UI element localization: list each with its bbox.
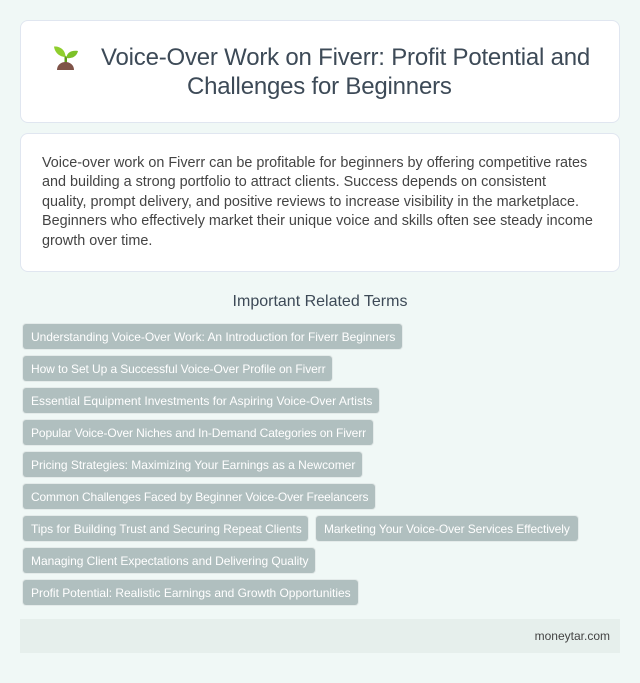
- tag 6: [23, 484, 375, 509]
- summary line 5: growth over time.: [42, 233, 152, 249]
- icon: seedling: [54, 46, 78, 70]
- tag 5: [23, 452, 362, 477]
- footer source: moneytar.com: [535, 629, 610, 643]
- tag 8: [316, 516, 578, 541]
- tag 2: How to Set Up a Successful Voice-Over Profile on Fiverr: [31, 362, 326, 376]
- tag 1: Understanding Voice-Over Work: An Introduction for Fiverr Beginners: [31, 330, 395, 344]
- tag 4: [23, 420, 373, 445]
- tag 10: Profit Potential: Realistic Earnings and Growth Opportunities: [31, 586, 351, 600]
- summary line 1: Voice-over work on Fiverr can be profitable for beginners by offering competitive rates: [42, 155, 587, 171]
- heading: related terms: Important Related Terms: [233, 293, 407, 310]
- panel: summary card: [20, 133, 620, 272]
- tag 8: Marketing Your Voice-Over Services Effectively: [324, 522, 570, 536]
- tag 10: [23, 580, 358, 605]
- tag 2: [23, 356, 332, 381]
- tag 4: Popular Voice-Over Niches and In-Demand Categories on Fiverr: [31, 426, 366, 440]
- tag 5: Pricing Strategies: Maximizing Your Earnings as a Newcomer: [31, 458, 355, 472]
- tag 3: [23, 388, 379, 413]
- tag 6: Common Challenges Faced by Beginner Voice-Over Freelancers: [31, 490, 368, 504]
- summary line 2: and building a strong portfolio to attract clients. Success depends on consistent: [42, 174, 546, 190]
- summary line 3: quality, prompt delivery, and positive reviews to increase visibility in the marketplace.: [42, 194, 579, 210]
- panel: title card: [20, 20, 620, 123]
- tag 9: [23, 548, 315, 573]
- title line 1: Voice-Over Work on Fiverr: Profit Potential and: [101, 44, 590, 71]
- tag 7: [23, 516, 308, 541]
- tag 9: Managing Client Expectations and Delivering Quality: [31, 554, 308, 568]
- summary line 4: Beginners who effectively market their unique voice and skills often see steady income: [42, 213, 593, 229]
- tag 3: Essential Equipment Investments for Aspiring Voice-Over Artists: [31, 394, 372, 408]
- tag 1: [23, 324, 402, 349]
- footer bar: [20, 619, 620, 653]
- tag 7: Tips for Building Trust and Securing Repeat Clients: [31, 522, 302, 536]
- title line 2: Challenges for Beginners: [187, 73, 452, 100]
